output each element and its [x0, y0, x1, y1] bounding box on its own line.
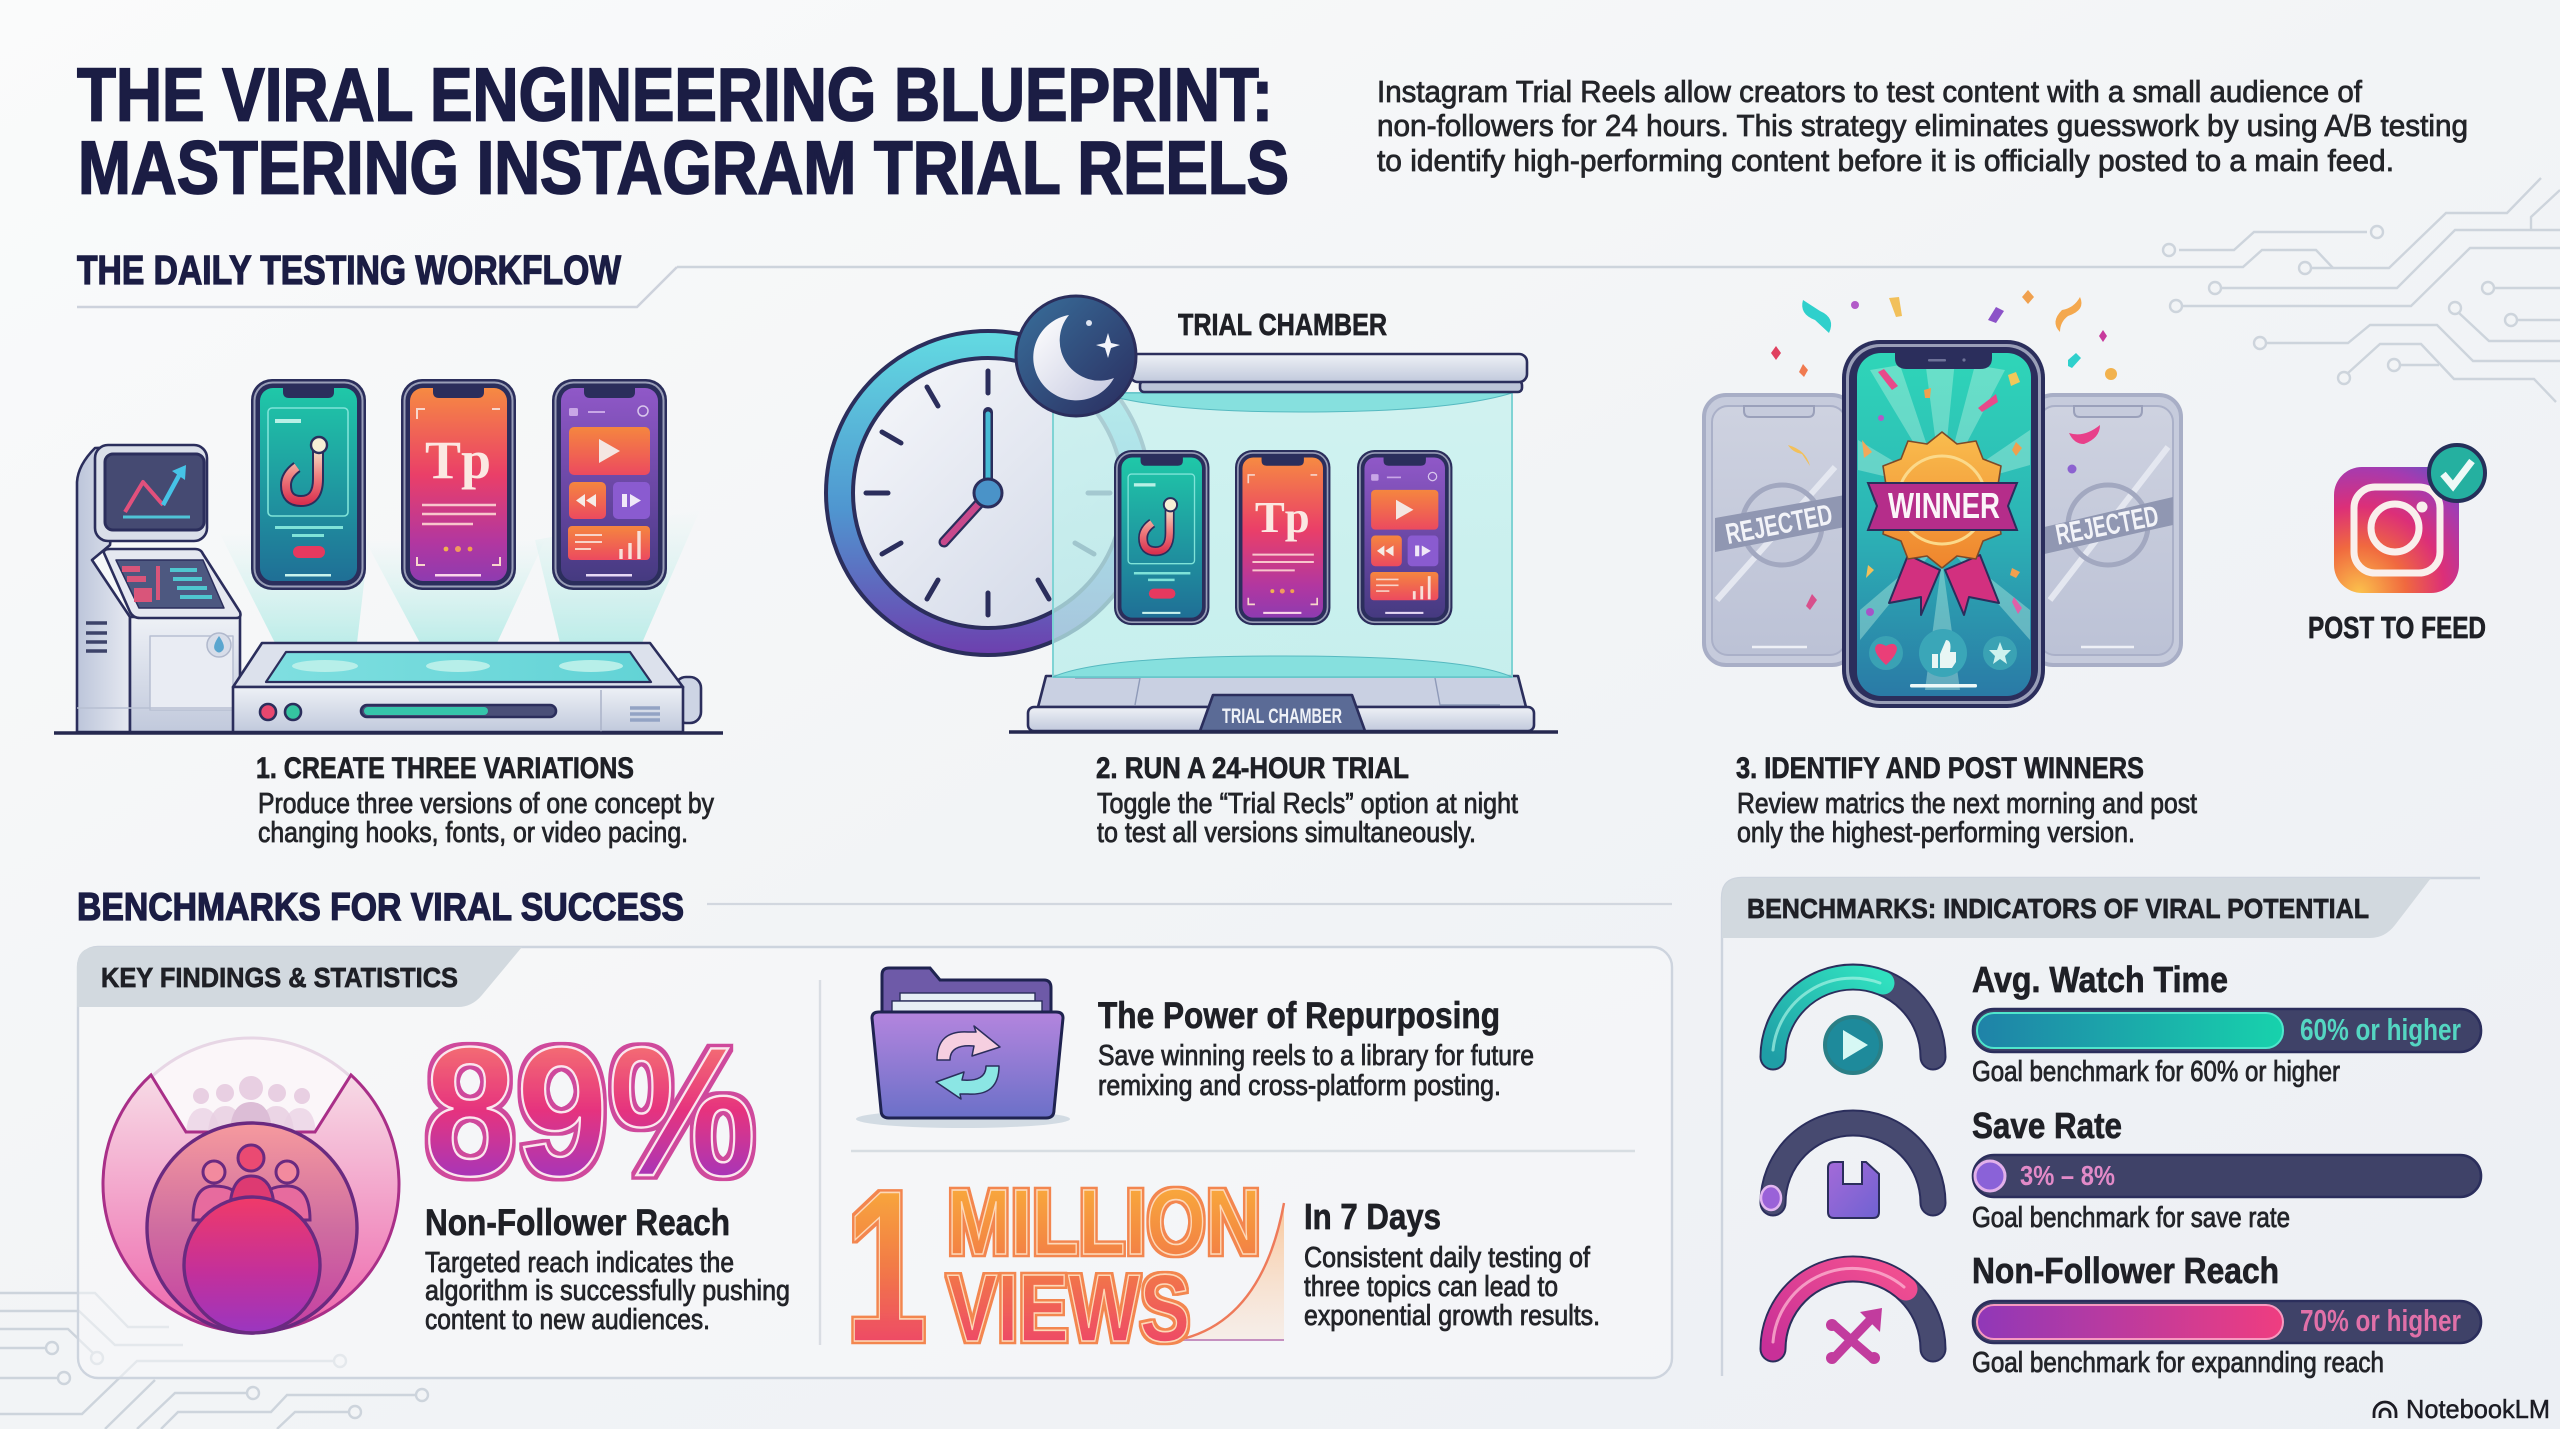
intro text: to identify high-performing content before it is officially posted to a main feed.: [1377, 143, 2394, 178]
metric: watch time: 60% or higher: [2300, 1012, 2461, 1047]
step 3 caption: 3. IDENTIFY AND POST WINNERS: [1736, 752, 2144, 785]
metric: watch time: Avg. Watch Time: [1972, 959, 2228, 1000]
repurposing text: [1098, 995, 1534, 1102]
rejected phone right: REJECTED: [2053, 500, 2161, 552]
rejected phone left: REJECTED: [1723, 499, 1835, 551]
stat: one million views: 1: [845, 1145, 927, 1387]
metric: watch time: [1972, 959, 2481, 1088]
stat label: content to new audiences.: [425, 1304, 710, 1336]
reaction buttons: [1869, 629, 2017, 688]
step 1 caption: 1. CREATE THREE VARIATIONS: [256, 752, 634, 785]
intro text: non-followers for 24 hours. This strategy eliminates guesswork by using A/B testing: [1377, 108, 2468, 143]
faded audience: [186, 1076, 316, 1132]
metric: save rate: [1972, 1105, 2481, 1234]
base line: [54, 731, 723, 735]
base line: [1009, 730, 1558, 734]
clock: [826, 331, 1150, 655]
tab: indicators: [1722, 878, 2431, 938]
winner banner: [1868, 483, 2017, 530]
in 7 days text: [1304, 1196, 1600, 1332]
gauge: watch time: [1773, 977, 1933, 1073]
rejected phone left: [1704, 395, 1854, 665]
glass chamber: [1053, 393, 1512, 677]
stat label: algorithm is successfully pushing: [425, 1275, 790, 1307]
metric: save rate: 3% – 8%: [2020, 1160, 2115, 1191]
kiosk: [77, 445, 240, 732]
step 1 caption: changing hooks, fonts, or video pacing.: [258, 817, 688, 849]
metric: non-follower reach: Goal benchmark for expannding reach: [1972, 1347, 2384, 1379]
metric: save rate: Save Rate: [1972, 1105, 2122, 1146]
tab: indicators: BENCHMARKS: INDICATORS OF VIRAL POTENTIAL: [1747, 893, 2369, 924]
ribbons: [1889, 555, 1999, 615]
stat: one million views: [845, 1145, 1261, 1387]
step 3 caption: Review matrics the next morning and post: [1737, 788, 2197, 820]
step 2 caption: [1096, 752, 1518, 849]
stat label: [425, 1202, 790, 1336]
check badge: [2429, 445, 2485, 501]
metric: watch time: Goal benchmark for 60% or higher: [1972, 1056, 2340, 1088]
intro text: [1377, 74, 2468, 178]
step 2 caption: 2. RUN A 24-HOUR TRIAL: [1096, 752, 1409, 785]
stat: one million views: VIEWS: [947, 1255, 1190, 1362]
post to feed label: POST TO FEED: [2308, 610, 2486, 645]
repurposing text: Save winning reels to a library for future: [1098, 1040, 1534, 1072]
icon: folder with sync arrows: [856, 968, 1070, 1128]
stat label: Targeted reach indicates the: [425, 1247, 734, 1279]
circuit decoration: bottom left: [0, 1293, 428, 1429]
in 7 days text: In 7 Days: [1304, 1196, 1441, 1237]
tab: key findings: [77, 947, 522, 1007]
step 2 caption: Toggle the “Trial Recls” option at night: [1097, 788, 1518, 820]
panel: indicators of viral potential: [1722, 878, 2481, 1379]
tab: key findings: KEY FINDINGS & STATISTICS: [101, 962, 458, 993]
winner phone: [1842, 340, 2045, 708]
step 2 illustration: trial chamber with clock: [826, 296, 1558, 732]
step 3 illustration: winner phone: [1704, 290, 2181, 708]
step 1 caption: Produce three versions of one concept by: [258, 788, 715, 820]
panel: key findings and statistics: [77, 947, 1672, 1387]
small phone: font: Tp: [1255, 492, 1310, 542]
metric: non-follower reach: 70% or higher: [2300, 1303, 2461, 1338]
sync arrows: [936, 1026, 1000, 1099]
phone: hook variation: [251, 379, 366, 590]
small phone: hook: [1114, 450, 1209, 625]
chamber lid: [1130, 354, 1527, 392]
medal: [1874, 432, 2010, 568]
moon badge: [1016, 296, 1136, 416]
in 7 days text: three topics can lead to: [1304, 1271, 1558, 1303]
people: [193, 1145, 310, 1220]
metric: save rate: Goal benchmark for save rate: [1972, 1202, 2290, 1234]
gauge: non-follower reach: [1773, 1268, 1933, 1364]
chamber badge: TRIAL CHAMBER: [1222, 705, 1342, 728]
heading: the daily testing workflow: THE DAILY TESTING WORKFLOW: [77, 247, 621, 293]
step 1 caption: [256, 752, 715, 849]
repurposing text: remixing and cross-platform posting.: [1098, 1070, 1501, 1102]
chart: exponential growth curve: [1176, 1203, 1284, 1340]
heading: benchmarks for viral success: BENCHMARKS FOR VIRAL SUCCESS: [77, 886, 684, 929]
metric: non-follower reach: Non-Follower Reach: [1972, 1250, 2279, 1291]
instagram icon with check: [2334, 445, 2485, 593]
notebooklm watermark: NotebookLM: [2406, 1394, 2550, 1424]
stat: 89 percent: 89%: [424, 1008, 756, 1214]
rejected phone right: [2031, 395, 2181, 665]
repurposing text: The Power of Repurposing: [1098, 995, 1500, 1036]
in 7 days text: exponential growth results.: [1304, 1300, 1600, 1332]
chamber badge: [1200, 695, 1365, 731]
phone: font variation: [401, 379, 516, 590]
circuit decoration: top right: [677, 178, 2560, 402]
in-screen confetti: [1862, 369, 2022, 616]
winner banner: WINNER: [1888, 485, 2000, 526]
phone: pacing variation: [552, 379, 667, 590]
step 3 caption: only the highest-performing version.: [1737, 817, 2135, 849]
intro text: Instagram Trial Reels allow creators to test content with a small audience of: [1377, 74, 2362, 109]
title: [77, 52, 1289, 210]
gauge: save rate: [1761, 1123, 1933, 1218]
tray: [233, 643, 701, 732]
stat: one million views: MILLION: [947, 1170, 1261, 1274]
in 7 days text: Consistent daily testing of: [1304, 1242, 1590, 1274]
title: MASTERING INSTAGRAM TRIAL REELS: [78, 126, 1289, 210]
small phone: pacing: [1357, 450, 1452, 625]
projection beams: [219, 510, 700, 643]
stat label: Non-Follower Reach: [425, 1202, 730, 1243]
chamber base: [1028, 676, 1534, 731]
phone: font variation: Tp: [425, 430, 491, 490]
step 3 caption: [1736, 752, 2197, 849]
title: THE VIRAL ENGINEERING BLUEPRINT:: [77, 52, 1273, 136]
icon: audience reach circles: [103, 1038, 399, 1333]
small phone: font: [1235, 450, 1330, 625]
confetti: [1771, 290, 2117, 380]
metric: non-follower reach: [1972, 1250, 2481, 1379]
step 2 caption: to test all versions simultaneously.: [1097, 817, 1476, 849]
chamber label: TRIAL CHAMBER: [1178, 307, 1387, 342]
step 1 illustration: three variations machine: [54, 379, 723, 733]
